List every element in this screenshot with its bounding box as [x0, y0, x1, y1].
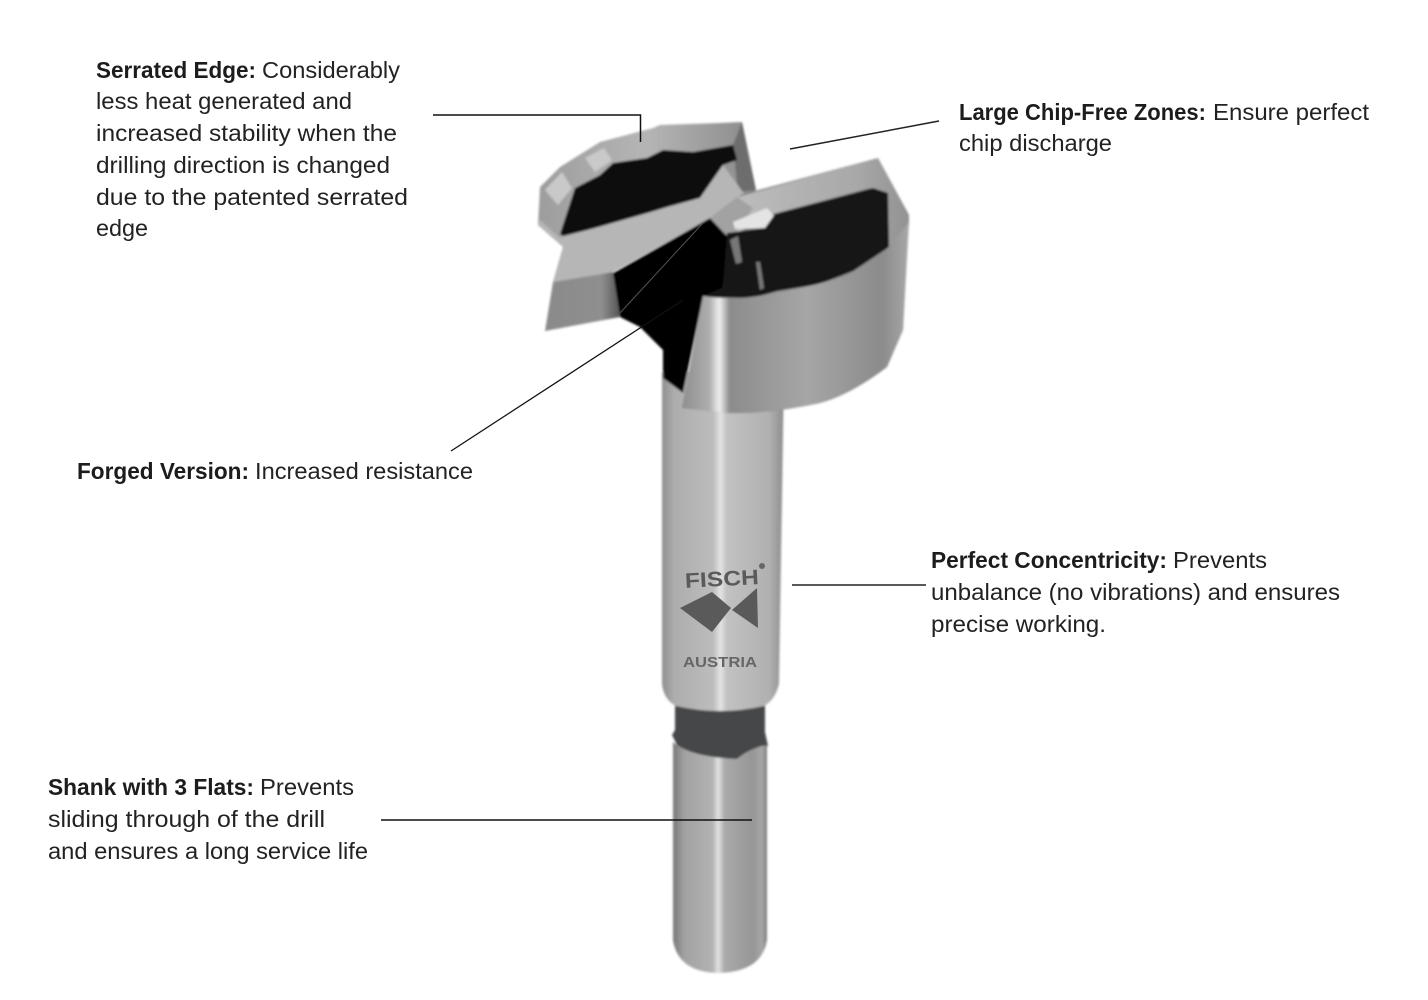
black groove collar — [672, 700, 768, 759]
text block: shank with 3 flats — [48, 774, 368, 864]
leader line: chip-free zones — [790, 121, 939, 149]
text block: serrated edge: Considerably — [262, 57, 401, 83]
text block: serrated edge: edge — [96, 215, 148, 241]
shank — [673, 742, 767, 973]
text block: forged version: Forged Version: — [77, 458, 249, 484]
text block: perfect concentricity: precise working. — [931, 611, 1106, 637]
leader line: serrated edge — [433, 115, 640, 142]
text block: perfect concentricity: unbalance (no vibrations) and ensures — [931, 579, 1340, 605]
forged surface specks — [730, 236, 764, 290]
right wing top face — [735, 158, 909, 252]
center point facet — [710, 197, 753, 236]
text block: large chip-free zones: Ensure perfect — [1213, 99, 1370, 125]
left wing black pocket — [560, 145, 737, 236]
drill bit photo illustration — [538, 122, 909, 973]
text block: serrated edge: less heat generated and — [96, 88, 352, 114]
text block: perfect concentricity — [931, 547, 1340, 637]
text block: large chip-free zones: chip discharge — [959, 130, 1112, 156]
text block: large chip-free zones — [959, 99, 1370, 156]
text block: shank with 3 flats: and ensures a long service life — [48, 838, 368, 864]
text block: large chip-free zones: Large Chip-Free Zones: — [959, 99, 1206, 125]
left wing lower face — [545, 272, 620, 331]
leader line: forged version inner segment — [620, 223, 703, 313]
logo: FISCH Austria — [680, 563, 765, 671]
text block: serrated edge: increased stability when the — [96, 120, 397, 146]
leader line: forged version — [451, 300, 683, 451]
leader line: concentricity — [792, 584, 926, 586]
text block: shank with 3 flats: sliding through of the drill — [48, 806, 325, 832]
center point highlight — [733, 208, 774, 229]
text block: serrated edge: drilling direction is changed — [96, 152, 390, 178]
right wing cylindrical body — [682, 222, 909, 413]
fish mark — [680, 588, 758, 632]
text block: serrated edge: Serrated Edge: — [96, 57, 256, 83]
text block: shank with 3 flats: Shank with 3 Flats: — [48, 774, 254, 800]
text block: shank with 3 flats: Prevents — [260, 774, 354, 800]
right wing black pocket — [703, 188, 889, 298]
text block: serrated edge: due to the patented serrated — [96, 184, 408, 210]
text block: serrated edge — [96, 57, 408, 241]
left wing inner shadow — [733, 122, 756, 192]
shaft — [662, 372, 784, 711]
text block: perfect concentricity: Perfect Concentricity: — [931, 547, 1167, 573]
serration facets — [545, 148, 612, 205]
text block: forged version: Increased resistance — [255, 458, 473, 484]
right head base — [682, 158, 909, 413]
center spur — [538, 165, 745, 282]
brand name: FISCH — [684, 566, 759, 593]
leader line: shank — [381, 819, 752, 821]
text block: perfect concentricity: Prevents — [1173, 547, 1267, 573]
left cutting wing — [538, 122, 756, 282]
registered mark — [759, 563, 765, 569]
text block: forged version — [77, 458, 473, 484]
central black flute — [613, 218, 728, 393]
origin text: AUSTRIA — [683, 654, 757, 671]
